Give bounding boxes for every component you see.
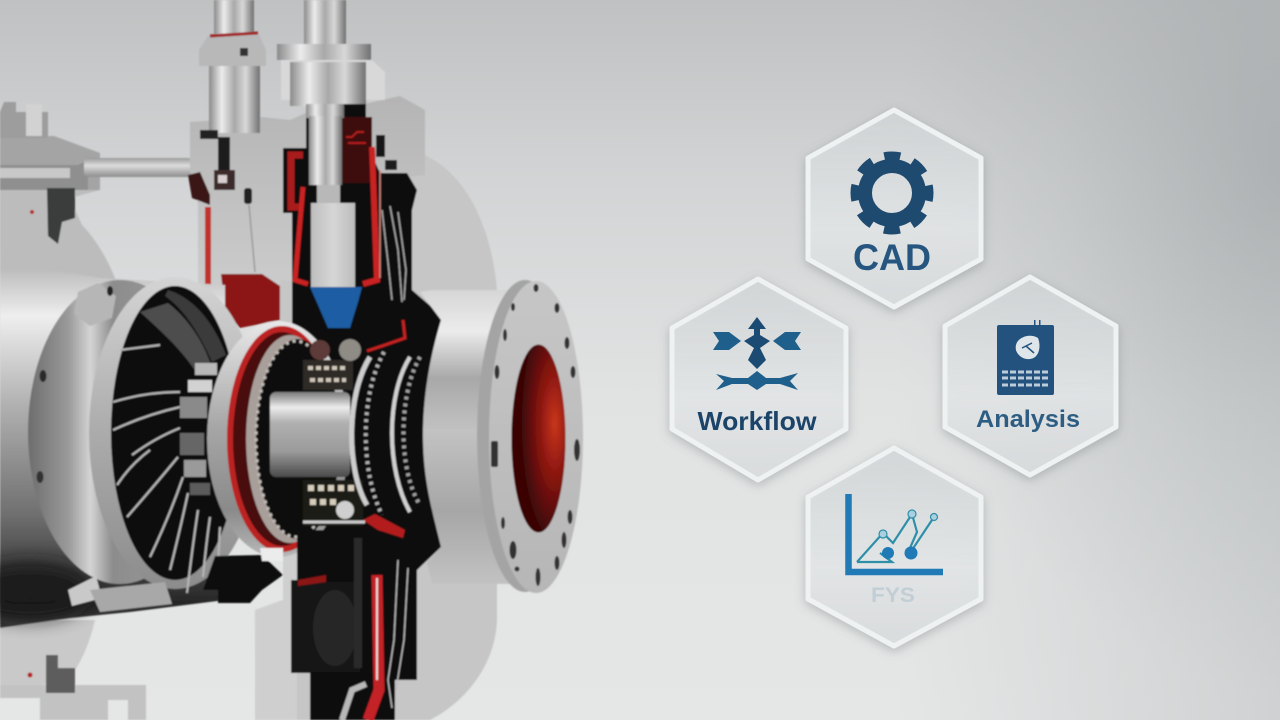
shadow under cylinder [0,560,92,620]
hub gear teeth [180,363,217,495]
left flange rings [28,277,261,612]
pipe 1 [199,0,266,133]
blue valve tip [310,287,362,328]
icon: line chart [848,494,943,572]
left rear body and bracket [0,102,126,330]
icon: workflow arrows [713,317,801,390]
machine: turbine cutaway illustration [0,0,583,720]
flange bore [512,344,566,532]
lower speckled fittings [303,480,365,526]
turbine impeller [111,286,239,593]
left housing details [188,130,292,342]
pipe 2 [277,0,385,106]
label: CAD: CAD [853,237,931,278]
lower housing strip [255,507,297,720]
panel: chart hexagon [808,448,981,646]
label: Workflow: Workflow [698,406,817,436]
panel: CAD hexagon [808,110,981,307]
right bearing rings [352,352,420,515]
label: Analysis: Analysis [976,406,1080,433]
rod [84,158,192,177]
lower gear mount [203,555,283,603]
central upper housing [190,96,425,300]
left main cylinder [0,269,225,628]
label: faint chart caption: FYS [871,584,915,607]
panel: Workflow hexagon [672,279,846,480]
right flange [477,280,583,593]
right large arc housing [255,120,497,720]
piston and shaft [306,104,355,287]
central ring with red arc [207,321,349,561]
right cylinder [420,290,510,584]
upper red pipe [367,320,405,351]
central cavity with red frame [270,104,441,570]
panel: Analysis hexagon [945,277,1116,475]
bottom left stand [0,620,146,720]
flange bolts [491,284,580,586]
upper speckled fittings [303,339,361,390]
icon: analysis report [997,320,1054,395]
shaft [270,392,350,477]
lower dark section with motor and wires [291,514,417,720]
icon: gear [855,156,929,230]
